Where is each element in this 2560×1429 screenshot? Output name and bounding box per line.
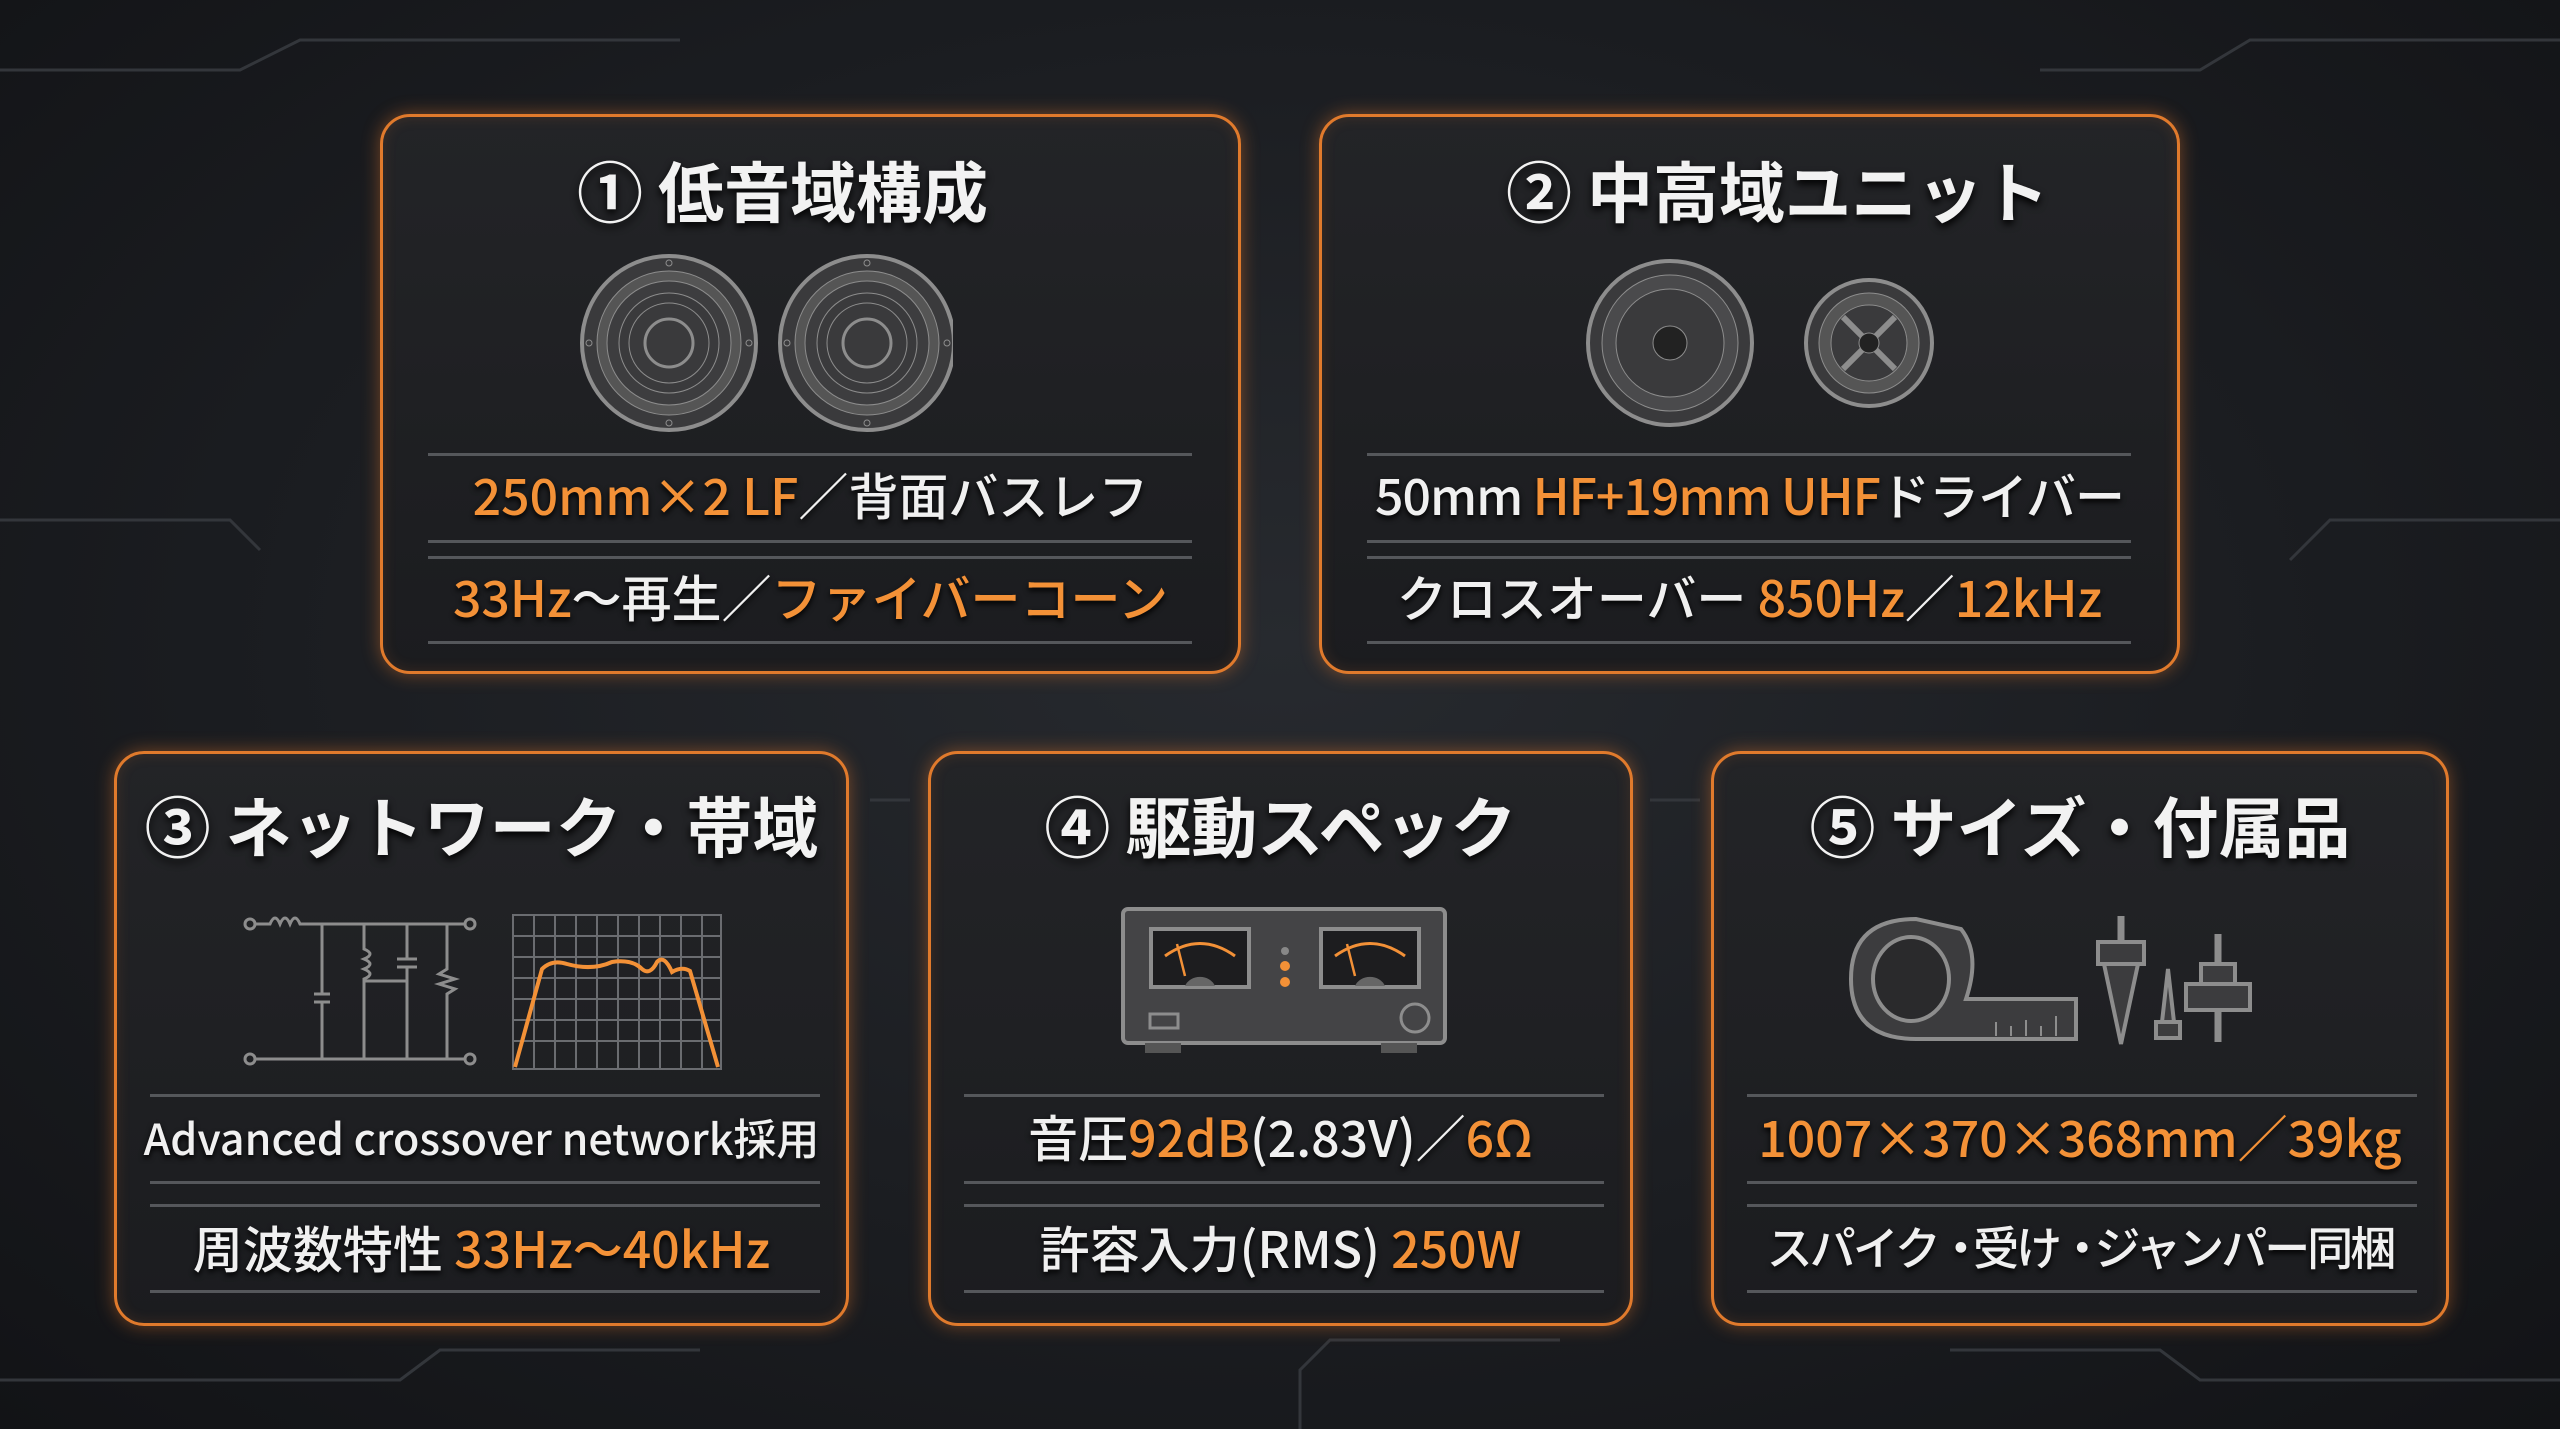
spec row 2: クロスオーバー 850Hz／12kHz: [1397, 560, 2102, 632]
icon: crossover circuit: [244, 916, 476, 1066]
panel: サイズ・付属品: [1711, 751, 2449, 1326]
spec row 1: 1007×370×368mm／39kg: [1758, 1100, 2402, 1172]
heading: ② 中高域ユニット: [1506, 141, 2049, 237]
spec row 2: スパイク・ 受け・ ジャンパー同梱: [1767, 1213, 2393, 1279]
panel: 駆動スペック: [928, 751, 1633, 1326]
spec row 1: 250mm×2 LF／背面バスレフ: [473, 458, 1148, 530]
spec row 2: 周波数特性 33Hz〜40kHz: [193, 1211, 770, 1283]
icon: amplifier with VU meters: [1121, 907, 1447, 1053]
panel: 低音域構成: [380, 114, 1241, 674]
panel: ネットワーク・帯域: [114, 751, 849, 1326]
spec row 1: Advanced crossover network採用: [144, 1106, 819, 1168]
chart: frequency response: [512, 914, 722, 1070]
heading: ① 低音域構成: [577, 141, 988, 237]
panel: 中高域ユニット: [1319, 114, 2180, 674]
icon: tape measure and spikes: [1849, 916, 2252, 1044]
icon: two woofers: [580, 254, 953, 432]
heading: ③ ネットワーク・帯域: [145, 776, 818, 872]
icon: midrange and tweeter: [1586, 259, 1934, 427]
heading: ⑤ サイズ・付属品: [1809, 776, 2350, 872]
spec row 1: 音圧92dB(2.83V)／6Ω: [1028, 1100, 1533, 1172]
spec row 1: 50mm HF+19mm UHFドライバー: [1375, 458, 2124, 530]
spec row 2: 33Hz〜再生／ファイバーコーン: [453, 560, 1168, 632]
heading: ④ 駆動スペック: [1044, 776, 1517, 872]
spec row 2: 許容入力(RMS) 250W: [1040, 1211, 1521, 1283]
